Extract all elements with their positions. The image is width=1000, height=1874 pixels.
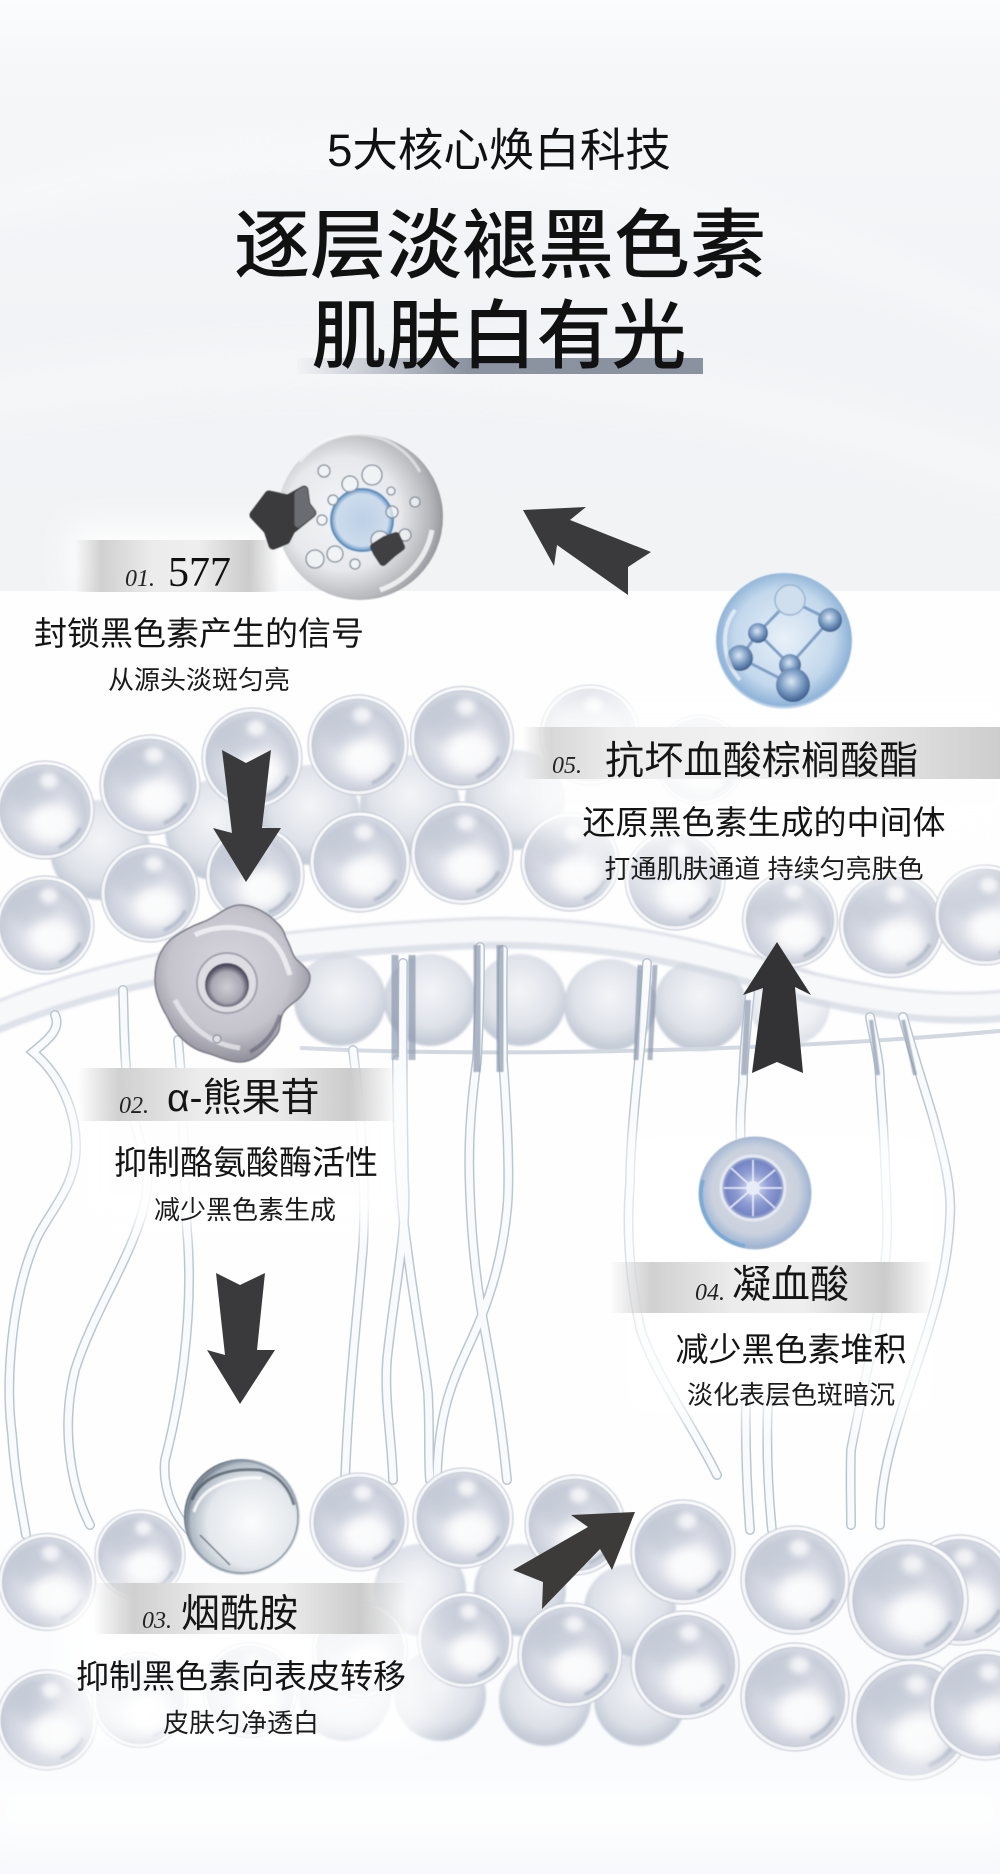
arrow: 03 to 04	[513, 1512, 635, 1609]
ingredient name: 烟酰胺	[181, 1593, 298, 1636]
ingredient name: 577	[168, 550, 231, 596]
ingredient name: 05.	[552, 753, 582, 779]
benefit: 打通肌肤通道 持续匀亮肤色	[604, 854, 924, 884]
icon: silver blob	[155, 905, 310, 1062]
ingredient name	[125, 550, 231, 596]
title block	[234, 125, 766, 378]
benefit: 从源头淡斑匀亮	[108, 665, 290, 695]
arrow: 02 to 03	[207, 1273, 275, 1404]
ingredient name: 04.	[695, 1280, 725, 1306]
ingredient name: 凝血酸	[732, 1264, 849, 1307]
headline line 2: 肌肤白有光	[311, 294, 687, 378]
benefit: 皮肤匀净透白	[163, 1708, 319, 1738]
description: 封锁黑色素产生的信号	[34, 615, 364, 652]
ingredient name: 03.	[142, 1608, 172, 1634]
benefit: 减少黑色素生成	[154, 1195, 336, 1225]
description: 还原黑色素生成的中间体	[582, 804, 946, 841]
label band	[523, 727, 1000, 779]
icon: blue crystal droplet	[699, 1137, 811, 1249]
title underline bar	[297, 358, 703, 374]
panel: 02 alpha-arbutin	[78, 905, 397, 1225]
headline line 1: 逐层淡褪黑色素	[234, 204, 766, 289]
panel: 04 tranexamic acid	[610, 1137, 933, 1410]
benefit: 淡化表层色斑暗沉	[687, 1380, 895, 1410]
ingredient name: 抗坏血酸棕榈酸酯	[605, 740, 919, 783]
icon: glass sphere	[184, 1459, 300, 1575]
ingredient name: 01.	[125, 566, 155, 592]
label band	[78, 1068, 397, 1121]
icon: molecule sphere	[716, 573, 852, 709]
upper bubble membrane	[0, 685, 1000, 1052]
description: 减少黑色素堆积	[676, 1331, 906, 1368]
label band	[75, 540, 280, 592]
description: 抑制黑色素向表皮转移	[76, 1658, 406, 1695]
panel: 03 niacinamide	[76, 1459, 407, 1738]
arrow: 04 to 05	[743, 942, 811, 1073]
white glows behind labels	[0, 690, 1000, 1850]
label band	[93, 1583, 407, 1634]
icon: bubble with melanin stars	[254, 434, 443, 600]
panel: 01 577	[34, 434, 443, 695]
subtitle: 5大核心焕白科技	[327, 125, 671, 176]
arrow: 01 to 02	[213, 750, 281, 882]
label band	[610, 1262, 933, 1313]
arrow: 05 to 01	[523, 507, 651, 595]
ingredient name: α-熊果苷	[167, 1077, 320, 1120]
description: 抑制酪氨酸酶活性	[114, 1144, 378, 1181]
panel: 05 ascorbyl palmitate	[523, 573, 1000, 884]
ingredient name: 02.	[119, 1093, 149, 1119]
lower bubble membrane	[0, 1468, 1000, 1780]
transparent tubes	[9, 945, 950, 1535]
